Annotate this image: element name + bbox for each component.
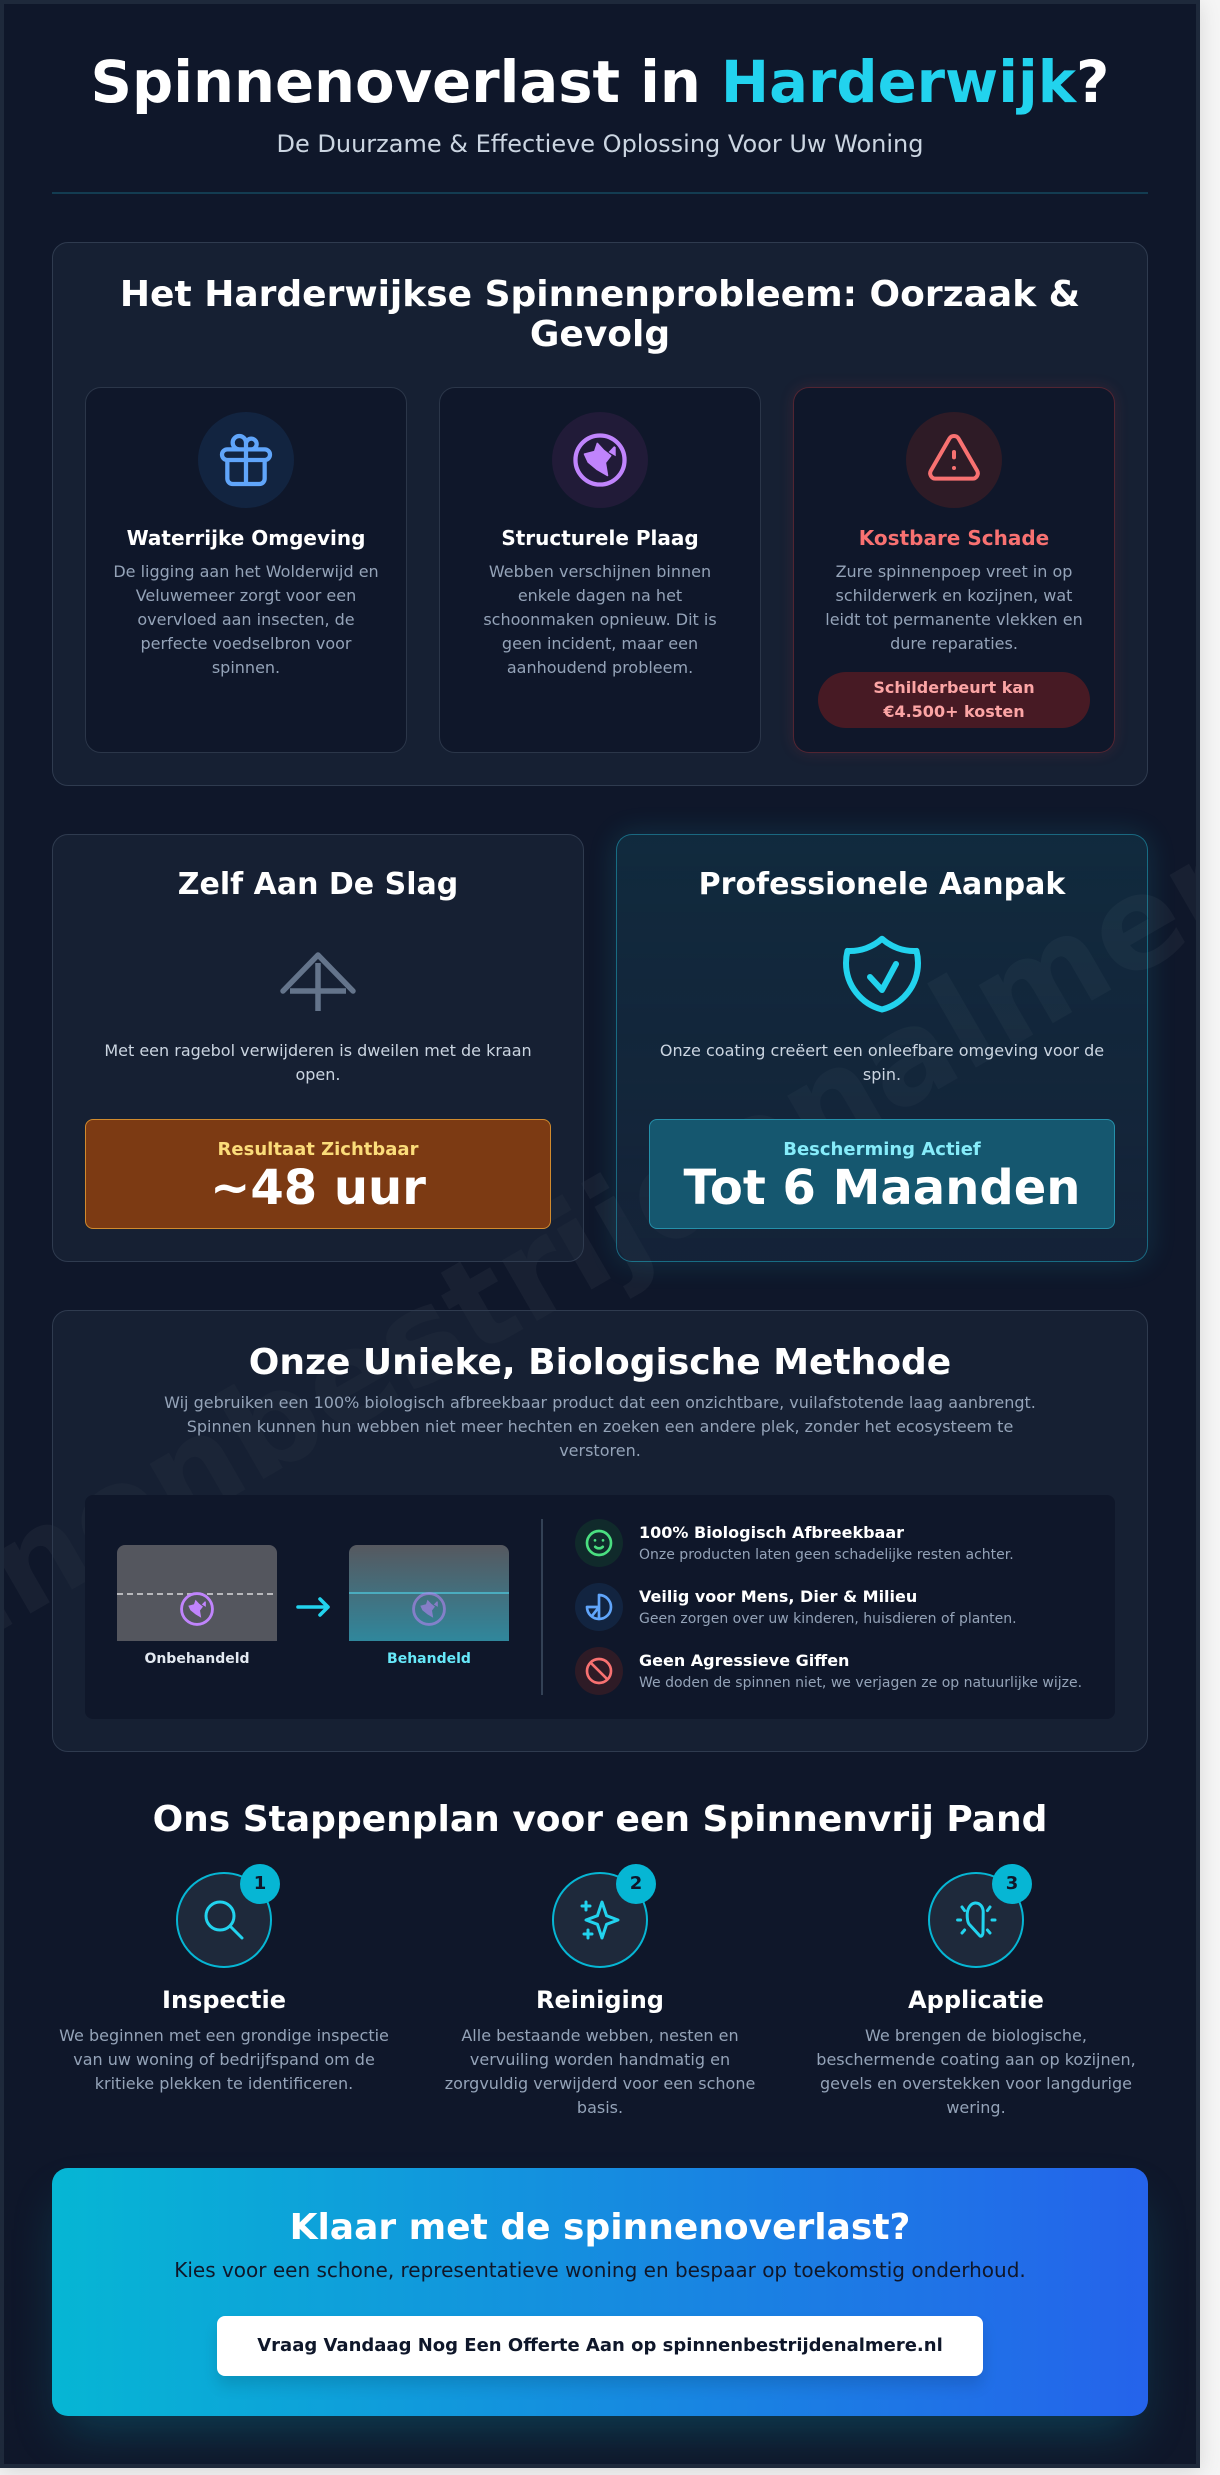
icon: shield check (843, 936, 921, 1012)
heading: Zelf Aan De Slag (178, 867, 458, 902)
cta button: Vraag Vandaag Nog Een Offerte Aan op spinnenbestrijdenalmere.nl (257, 2335, 943, 2356)
method diagram and benefits (85, 1495, 1115, 1719)
benefit text: 100% Biologisch Afbreekbaar (639, 1523, 904, 1542)
panel: do it yourself (52, 834, 584, 1262)
label: treated: Behandeld (387, 1651, 471, 1667)
cost callout: €4.500+ kosten (883, 702, 1025, 721)
icon: warning triangle (906, 412, 1002, 508)
result box (649, 1119, 1115, 1229)
visual: untreated surface (117, 1545, 277, 1641)
cta heading: Klaar met de spinnenoverlast? (290, 2207, 910, 2248)
call to action (52, 2168, 1148, 2416)
step text (59, 2026, 389, 2093)
panel: problem, cause and effect (52, 242, 1148, 786)
panel: professional approach (616, 834, 1148, 1262)
card: structural plague (439, 387, 761, 753)
cost callout (818, 672, 1090, 728)
step text: We brengen de biologische, (865, 2026, 1087, 2045)
benefit text: Geen zorgen over uw kinderen, huisdieren of planten. (639, 1611, 1017, 1627)
icon: magnifier with badge 1 (176, 1872, 272, 1968)
icon: spider badge (552, 412, 648, 508)
text (660, 1041, 1104, 1084)
intro text (164, 1393, 1036, 1460)
card text: overvloed aan insecten, de (137, 610, 355, 629)
card text: Veluwemeer zorgt voor een (136, 586, 356, 605)
step text: vervuiling worden handmatig en (470, 2050, 730, 2069)
label: untreated: Onbehandeld (144, 1651, 250, 1667)
step text: Alle bestaande webben, nesten en (461, 2026, 739, 2045)
cta button (217, 2316, 983, 2376)
step text: zorgvuldig verwijderd voor een schone (445, 2074, 755, 2093)
step text: wering. (946, 2098, 1006, 2117)
icon: coating drop with badge 3 (928, 1872, 1024, 1968)
icon: magnifier with badge 1: 1 (254, 1873, 266, 1894)
step 3 (816, 1864, 1136, 2117)
icon: sparkles with badge 2 (552, 1872, 648, 1968)
arrow (296, 1597, 330, 1617)
intro text: verstoren. (559, 1441, 641, 1460)
step text: basis. (577, 2098, 623, 2117)
visual: treated surface (349, 1545, 509, 1641)
step name: Inspectie (162, 1986, 286, 2014)
step text: van uw woning of bedrijfspand om de (73, 2050, 375, 2069)
step text (816, 2026, 1136, 2117)
benefit text: Geen Agressieve Giffen (639, 1651, 849, 1670)
result value: ~48 uur (210, 1160, 426, 1216)
benefit: biodegradable (575, 1519, 1014, 1567)
card: costly damage (793, 387, 1115, 753)
card text: perfecte voedselbron voor (141, 634, 351, 653)
icon: broom (280, 952, 356, 1011)
benefit text (639, 1651, 1082, 1691)
card heading: Structurele Plaag (501, 526, 699, 550)
card text: enkele dagen na het (518, 586, 682, 605)
step text: beschermende coating aan op kozijnen, (816, 2050, 1136, 2069)
card text: schilderwerk en kozijnen, wat (836, 586, 1072, 605)
benefit text: Onze producten laten geen schadelijke resten achter. (639, 1547, 1014, 1563)
card text (825, 562, 1083, 653)
benefit text: Veilig voor Mens, Dier & Milieu (639, 1587, 917, 1606)
heading: problem: Gevolg (530, 314, 670, 355)
heading: problem: Het Harderwijkse Spinnenprobleem: Oorzaak & (120, 274, 1080, 315)
step text: gevels en overstekken voor langdurige (820, 2074, 1132, 2093)
intro text: Wij gebruiken een 100% biologisch afbreekbaar product dat een onzichtbare, vuilafstotende laag aanbrengt. (164, 1393, 1036, 1412)
card text (483, 562, 717, 677)
text: spin. (863, 1065, 901, 1084)
heading: problem (120, 274, 1080, 355)
card: water-rich environment (85, 387, 407, 753)
comparison row (52, 827, 1155, 1269)
text: open. (295, 1065, 340, 1084)
intro text: Spinnen kunnen hun webben niet meer hechten en zoeken een andere plek, zonder het ecosysteem te (187, 1417, 1013, 1436)
card text: Webben verschijnen binnen (489, 562, 711, 581)
heading: step plan: Ons Stappenplan voor een Spinnenvrij Pand (153, 1799, 1047, 1840)
cost callout: Schilderbeurt kan (873, 678, 1035, 697)
panel: biological method (52, 1310, 1148, 1752)
benefit text: We doden de spinnen niet, we verjagen ze op natuurlijke wijze. (639, 1675, 1082, 1691)
text: Onze coating creëert een onleefbare omgeving voor de (660, 1041, 1104, 1060)
card text: De ligging aan het Wolderwijd en (113, 562, 379, 581)
result label: Resultaat Zichtbaar (218, 1139, 418, 1160)
card text: spinnen. (212, 658, 280, 677)
step text: We beginnen met een grondige inspectie (59, 2026, 389, 2045)
card text: leidt tot permanente vlekken en (825, 610, 1083, 629)
step name: Applicatie (908, 1986, 1044, 2014)
cause cards (85, 384, 1118, 756)
benefit: no poisons (575, 1647, 1082, 1695)
benefit text (639, 1523, 1014, 1563)
step text: kritieke plekken te identificeren. (95, 2074, 353, 2093)
step text (445, 2026, 755, 2117)
card heading: Waterrijke Omgeving (127, 526, 365, 550)
icon: ban (575, 1647, 623, 1695)
text (104, 1041, 532, 1084)
card text: geen incident, maar een (502, 634, 698, 653)
subtitle: De Duurzame & Effectieve Oplossing Voor Uw Woning (277, 130, 923, 158)
step name: Reiniging (536, 1986, 664, 2014)
title: Spinnenoverlast in Harderwijk? (91, 49, 1109, 116)
icon: sparkles with badge 2: 2 (630, 1873, 642, 1894)
text: Met een ragebol verwijderen is dweilen met de kraan (104, 1041, 532, 1060)
steps (59, 1864, 1136, 2117)
icon: gift (198, 412, 294, 508)
result box (85, 1119, 551, 1229)
benefit: safe (575, 1583, 1017, 1631)
card text: schoonmaken opnieuw. Dit is (483, 610, 717, 629)
result value: Tot 6 Maanden (684, 1160, 1080, 1216)
cta text: Kies voor een schone, representatieve woning en bespaar op toekomstig onderhoud. (174, 2258, 1026, 2282)
icon: globe pie (575, 1583, 623, 1631)
step 2 (445, 1864, 755, 2117)
icon: smiley (575, 1519, 623, 1567)
header (91, 49, 1109, 158)
card heading: Kostbare Schade (859, 526, 1049, 550)
card text: dure reparaties. (890, 634, 1018, 653)
step 1 (59, 1864, 389, 2093)
result label: Bescherming Actief (783, 1139, 981, 1160)
heading: Professionele Aanpak (699, 867, 1065, 902)
card text: Zure spinnenpoep vreet in op (836, 562, 1072, 581)
card text (113, 562, 379, 677)
benefit text (639, 1587, 1017, 1627)
icon: coating drop with badge 3: 3 (1006, 1873, 1018, 1894)
heading: Onze Unieke, Biologische Methode (249, 1342, 951, 1383)
card text: aanhoudend probleem. (507, 658, 693, 677)
